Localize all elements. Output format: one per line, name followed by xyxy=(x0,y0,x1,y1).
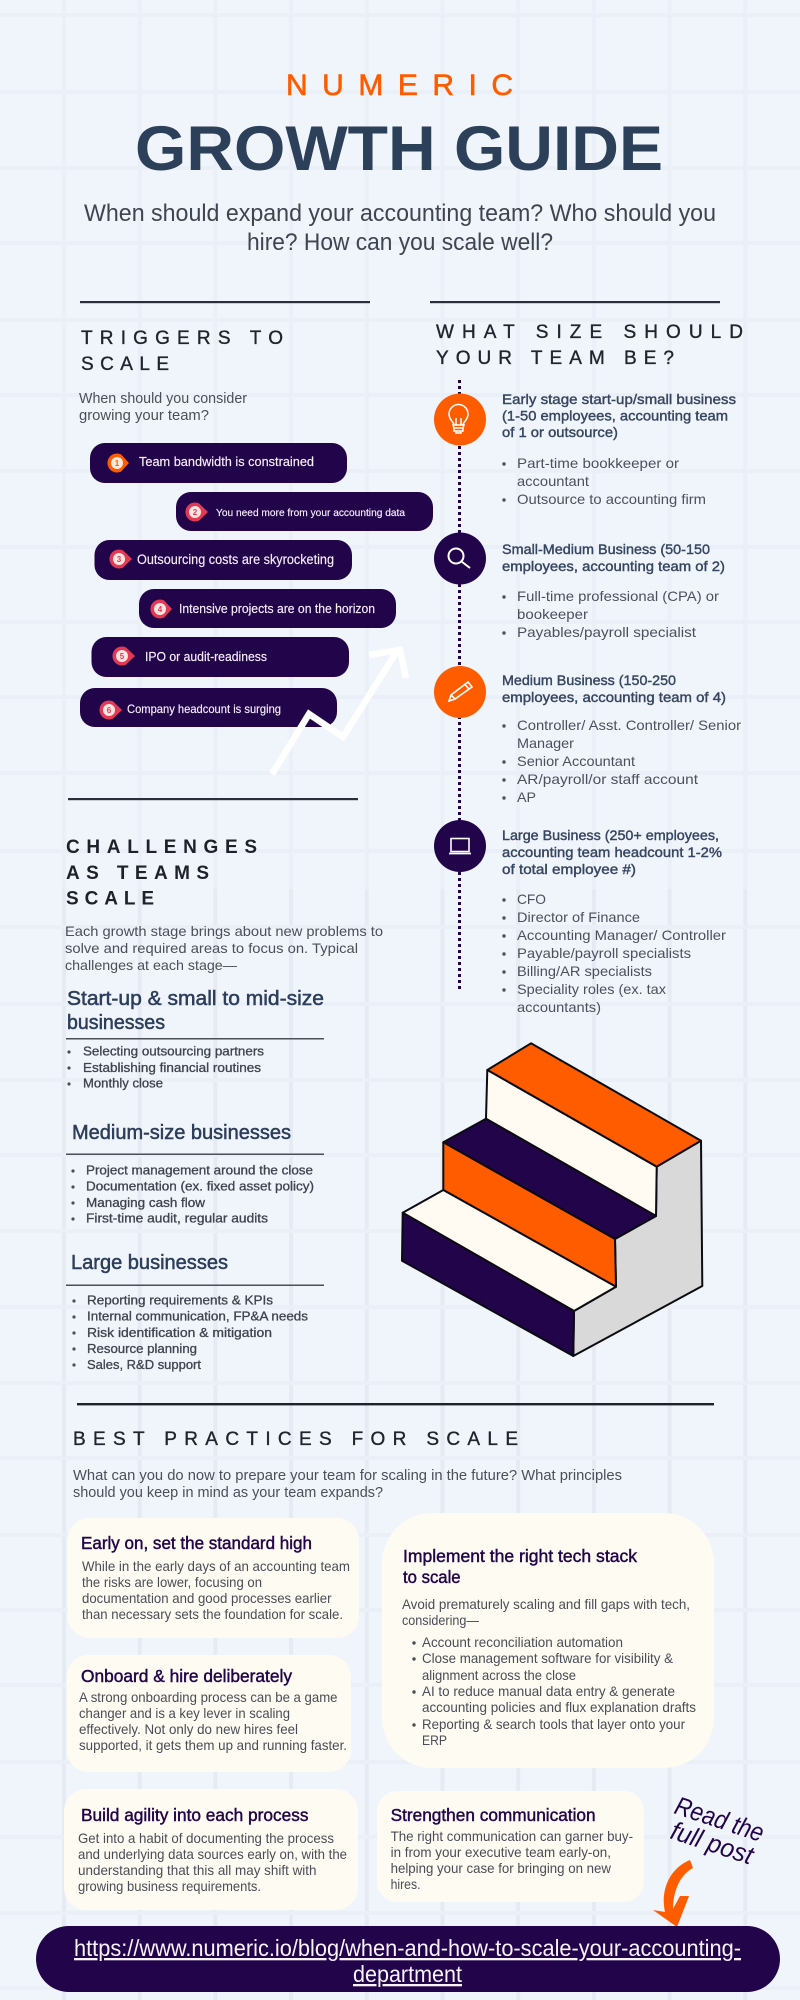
heading: what size: WHAT SIZE SHOULD xyxy=(436,322,743,343)
challenge group: large xyxy=(66,1252,324,1372)
stage 2 text: employees, accounting team of 2) xyxy=(502,558,725,574)
stage 4 text: CFO xyxy=(517,891,546,907)
illustration: staircase xyxy=(402,1043,702,1356)
trigger 1 xyxy=(90,443,347,483)
footer link banner: department xyxy=(353,1961,463,1987)
panel: what size should your team be xyxy=(434,322,743,1015)
heading: what size: YOUR TEAM BE? xyxy=(436,348,674,369)
intro text: challenges xyxy=(65,923,383,973)
icon: light bulb xyxy=(434,394,486,446)
stage 3 text: Controller/ Asst. Controller/ Senior xyxy=(517,717,741,733)
challenge group: medium-size: Documentation (ex. fixed asset policy) xyxy=(86,1180,314,1194)
trigger 6 xyxy=(80,688,337,727)
trigger 4: Intensive projects are on the horizon xyxy=(179,602,375,616)
trigger 4: 4 xyxy=(158,605,163,614)
stage 1 text: Part-time bookkeeper or xyxy=(517,455,679,471)
stage 2 text: Payables/payroll specialist xyxy=(517,624,696,640)
brand name: NUMERIC xyxy=(286,69,513,102)
panel: triggers to scale xyxy=(79,328,433,774)
trigger 6: Company headcount is surging xyxy=(127,702,281,716)
stage 1 text xyxy=(502,391,736,507)
card: early on xyxy=(68,1518,359,1638)
subtitle xyxy=(84,200,716,256)
stage 3 text: Medium Business (150-250 xyxy=(502,672,676,688)
card: tech stack: Close management software for visibility & xyxy=(422,1650,674,1666)
challenge group: start-up: Start-up & small to mid-size xyxy=(67,988,324,1010)
challenge group: large: Large businesses xyxy=(71,1252,228,1274)
callout: read the full post: full post xyxy=(667,1815,759,1871)
header xyxy=(84,69,716,256)
heading: triggers to scale: SCALE xyxy=(81,354,169,375)
stage 1 text: of 1 or outsource) xyxy=(502,424,618,440)
challenge group: medium-size: Project management around the close xyxy=(86,1164,313,1178)
intro text: challenges: solve and required areas to focus on. Typical xyxy=(65,940,358,956)
footer link banner xyxy=(36,1926,780,1992)
stage 2 text: Small-Medium Business (50-150 xyxy=(502,541,710,557)
card: communication: Strengthen communication xyxy=(391,1805,596,1825)
card: agility: Build agility into each process xyxy=(81,1805,309,1825)
card: communication xyxy=(377,1791,644,1902)
challenge group: large: Reporting requirements & KPIs xyxy=(87,1294,273,1308)
arrow: white growth arrow xyxy=(272,650,406,774)
stage 4 text: Accounting Manager/ Controller xyxy=(517,927,726,943)
challenge group: medium-size xyxy=(66,1122,324,1226)
challenge group: start-up xyxy=(66,988,324,1090)
card: agility: understanding that this all may shift with xyxy=(78,1862,316,1878)
card: tech stack: AI to reduce manual data entry & generate xyxy=(422,1683,675,1699)
intro text: challenges: Each growth stage brings about new problems to xyxy=(65,923,383,939)
timeline dotted line xyxy=(458,380,461,989)
stage 4 text: accountants) xyxy=(517,999,601,1015)
stage 4 text: accounting team headcount 1-2% xyxy=(502,844,722,860)
subtitle: hire? How can you scale well? xyxy=(247,229,553,256)
card: early on: the risks are lower, focusing on xyxy=(82,1574,262,1590)
stage 3 text: AP xyxy=(517,789,536,805)
intro text: best practices: should you keep in mind as your team expands? xyxy=(73,1484,383,1501)
card: tech stack: Account reconciliation automation xyxy=(422,1634,623,1650)
challenge group: large: Risk identification & mitigation xyxy=(87,1326,272,1340)
card: early on: While in the early days of an accounting team xyxy=(82,1558,350,1574)
stage 2 text: bookeeper xyxy=(517,606,588,622)
trigger 3 xyxy=(94,540,352,580)
card: early on: Early on, set the standard high xyxy=(81,1533,312,1553)
card: onboard: Onboard & hire deliberately xyxy=(81,1666,292,1686)
card: tech stack: considering— xyxy=(402,1612,479,1628)
challenge group: start-up: Selecting outsourcing partners xyxy=(83,1044,264,1058)
card: agility: and underlying data sources early on, with the xyxy=(78,1846,347,1862)
heading: best practices: BEST PRACTICES FOR SCALE xyxy=(73,1429,518,1450)
challenge group: medium-size: Managing cash flow xyxy=(86,1196,206,1210)
challenge group: large: Internal communication, FP&A needs xyxy=(87,1310,308,1324)
subtitle: When should expand your accounting team? Who should you xyxy=(84,200,716,227)
footer link banner: https://www.numeric.io/blog/when-and-how-to-scale-your-accounting- xyxy=(74,1935,741,1961)
card: onboard: supported, it gets them up and running faster. xyxy=(79,1737,347,1753)
card: communication: helping your case for bringing on new xyxy=(391,1860,612,1876)
card: tech stack: Implement the right tech stack xyxy=(403,1546,637,1566)
card: tech stack: ERP xyxy=(422,1732,447,1748)
intro text: triggers xyxy=(79,390,247,424)
title: GROWTH GUIDE xyxy=(135,114,663,184)
heading: triggers to scale: TRIGGERS TO xyxy=(81,328,283,349)
callout: read the full post xyxy=(667,1790,768,1871)
trigger 1: 1 xyxy=(115,459,120,468)
intro text: challenges: challenges at each stage— xyxy=(65,957,237,973)
stage 3 text xyxy=(502,672,741,805)
card: tech stack: Avoid prematurely scaling and fill gaps with tech, xyxy=(402,1596,690,1612)
trigger 2 xyxy=(176,492,433,531)
intro text: triggers: growing your team? xyxy=(79,407,209,424)
challenge group: medium-size: Medium-size businesses xyxy=(72,1122,291,1144)
callout: read the full post: Read the xyxy=(671,1790,768,1848)
challenge group: start-up: Establishing financial routines xyxy=(83,1061,261,1075)
trigger 6: 6 xyxy=(107,706,112,715)
stage 2 text: Full-time professional (CPA) or xyxy=(517,588,719,604)
card: communication: hires. xyxy=(391,1876,420,1892)
arrow: orange curved arrow xyxy=(653,1860,693,1927)
challenge group: start-up: Monthly close xyxy=(83,1076,163,1090)
trigger 5: IPO or audit-readiness xyxy=(145,650,267,664)
card: agility xyxy=(64,1789,358,1910)
challenge group: medium-size: First-time audit, regular audits xyxy=(86,1212,268,1226)
trigger 2: 2 xyxy=(193,508,198,517)
stage 4 text xyxy=(502,827,726,1015)
trigger 4 xyxy=(139,589,396,628)
stage 1 text: (1-50 employees, accounting team xyxy=(502,408,728,424)
card: communication: in from your executive team early-on, xyxy=(391,1844,611,1860)
stage 1 text: Early stage start-up/small business xyxy=(502,391,736,407)
card: agility: growing business requirements. xyxy=(78,1878,261,1894)
stage 4 text: Payable/payroll specialists xyxy=(517,945,691,961)
panel: best practices for scale xyxy=(64,1429,714,1910)
trigger 2: You need more from your accounting data xyxy=(216,507,405,519)
heading: challenges: AS TEAMS xyxy=(66,863,209,884)
card: tech stack: alignment across the close xyxy=(422,1667,576,1683)
stage 3 text: Manager xyxy=(517,735,574,751)
trigger 1: Team bandwidth is constrained xyxy=(139,455,314,469)
icon: pencil xyxy=(434,666,486,718)
card: onboard xyxy=(67,1655,351,1772)
stage 4 text: of total employee #) xyxy=(502,861,636,877)
heading: challenges: SCALE xyxy=(66,888,154,910)
card: early on: documentation and good processes earlier xyxy=(82,1590,332,1606)
heading: challenges xyxy=(66,837,257,910)
stage 4 text: Speciality roles (ex. tax xyxy=(517,981,666,997)
stage 3 text: AR/payroll/or staff account xyxy=(517,771,698,787)
trigger 3: Outsourcing costs are skyrocketing xyxy=(137,552,334,567)
card: tech stack: to scale xyxy=(403,1567,461,1587)
intro text: best practices xyxy=(73,1467,622,1501)
intro text: best practices: What can you do now to prepare your team for scaling in the future? What principles xyxy=(73,1467,622,1484)
card: onboard: effectively. Not only do new hires feel xyxy=(79,1721,298,1737)
intro text: triggers: When should you consider xyxy=(79,390,247,407)
panel: challenges as teams scale xyxy=(65,837,383,1372)
stage 1 text: accountant xyxy=(517,473,589,489)
stage 1 text: Outsource to accounting firm xyxy=(517,491,706,507)
stage 3 text: employees, accounting team of 4) xyxy=(502,689,726,705)
card: communication: The right communication can garner buy- xyxy=(391,1828,633,1844)
stage 4 text: Billing/AR specialists xyxy=(517,963,652,979)
heading: what size xyxy=(436,322,743,369)
stage 4 text: Large Business (250+ employees, xyxy=(502,827,719,843)
card: onboard: changer and is a key lever in scaling xyxy=(79,1705,290,1721)
card: early on: than necessary sets the foundation for scale. xyxy=(82,1606,343,1622)
stage 2 text xyxy=(502,541,725,640)
trigger 3: 3 xyxy=(117,555,122,564)
card: tech stack: accounting policies and flux explanation drafts xyxy=(422,1699,696,1715)
card: agility: Get into a habit of documenting the process xyxy=(78,1830,334,1846)
icon: laptop xyxy=(434,820,486,872)
challenge group: start-up: businesses xyxy=(67,1012,165,1034)
stage 3 text: Senior Accountant xyxy=(517,753,635,769)
challenge group: large: Resource planning xyxy=(87,1342,197,1356)
heading: triggers to scale xyxy=(81,328,283,375)
card: onboard: A strong onboarding process can be a game xyxy=(79,1689,338,1705)
card: tech stack xyxy=(382,1513,714,1768)
icon: magnifier xyxy=(434,532,486,584)
trigger 5: 5 xyxy=(120,652,125,661)
challenge group: large: Sales, R&D support xyxy=(87,1358,202,1372)
card: tech stack: Reporting & search tools that layer onto your xyxy=(422,1716,685,1732)
heading: challenges: CHALLENGES xyxy=(66,837,257,858)
trigger 5 xyxy=(92,637,349,677)
stage 4 text: Director of Finance xyxy=(517,909,640,925)
